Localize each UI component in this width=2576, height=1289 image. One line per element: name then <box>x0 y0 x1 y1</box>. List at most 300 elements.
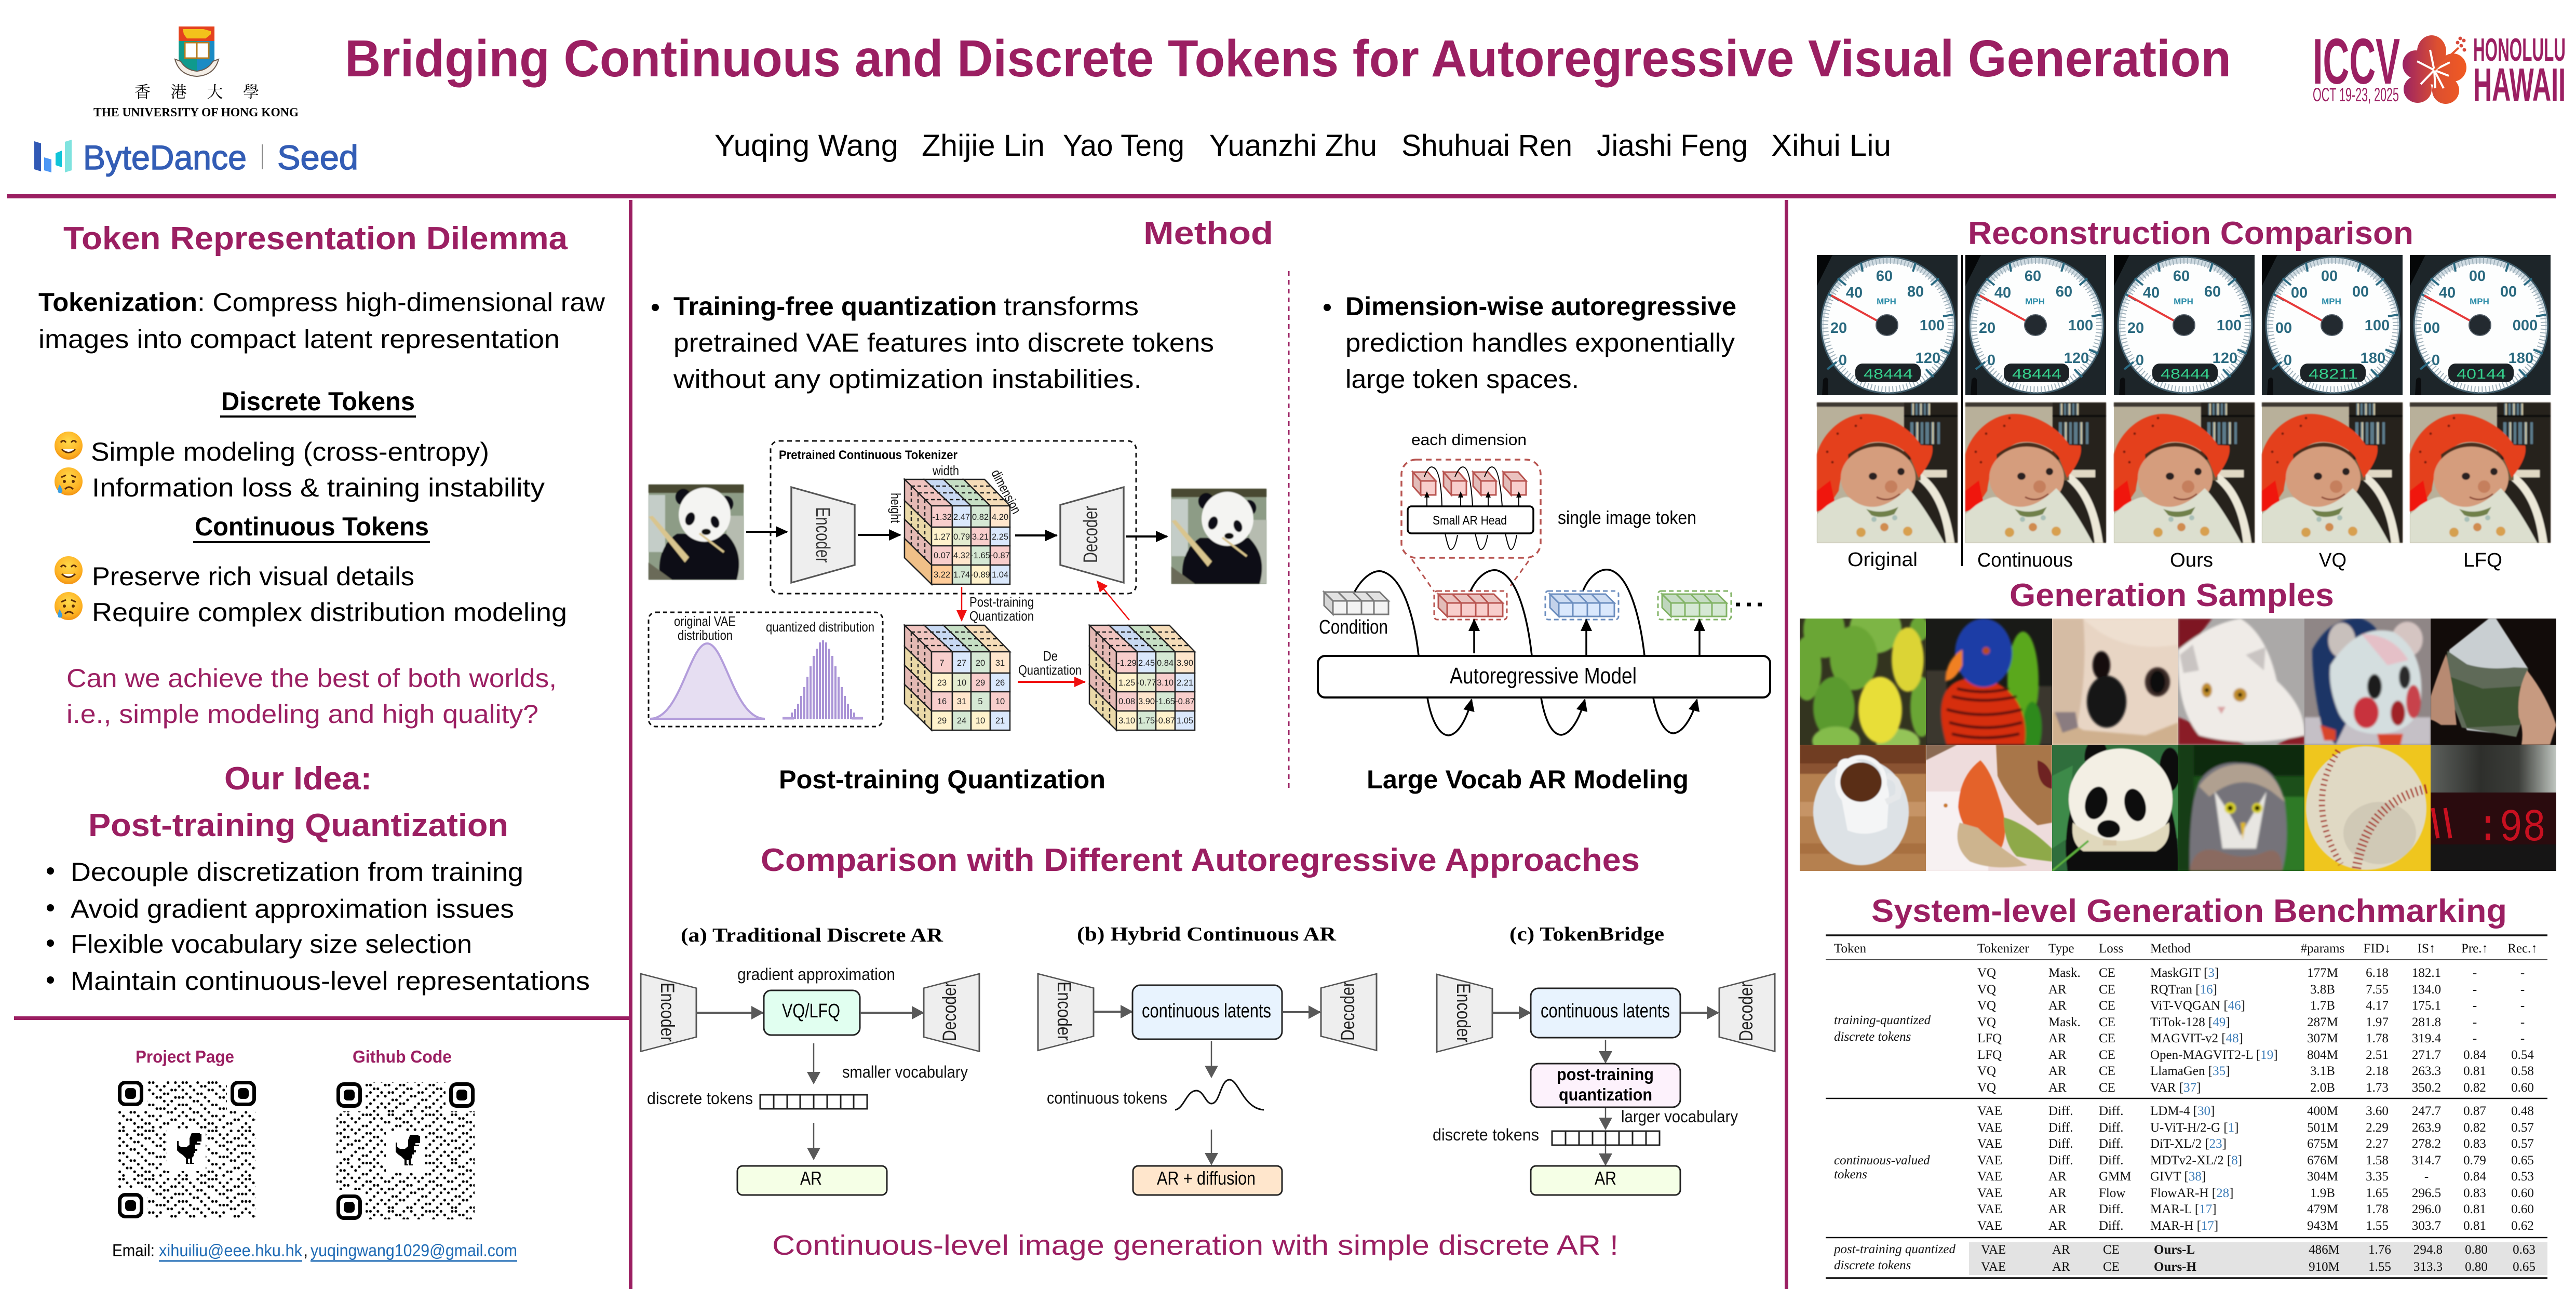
table group: continuous-valued tokens: 0.60 <box>2511 1202 2534 1216</box>
image: speedometer ours: 40 <box>2143 285 2160 301</box>
text block: dimension-wise autoregressive: Dimension-wise autoregressive <box>1345 292 1736 321</box>
labels: width height dimension: height <box>888 493 903 523</box>
image: speedometer VQ <box>2262 255 2403 395</box>
label: project page: Project Page <box>136 1047 234 1066</box>
box: continuous latents <box>1531 988 1680 1038</box>
table group: training-quantized discrete tokens: 0.82 <box>2463 1081 2486 1095</box>
table group: continuous-valued tokens: 0.53 <box>2511 1170 2534 1184</box>
image: speedometer LFQ: 180 <box>2508 350 2533 367</box>
table group: training-quantized discrete tokens: 271.7 <box>2412 1048 2441 1062</box>
table group: training-quantized discrete tokens: 7.55 <box>2366 983 2389 997</box>
icon: cry <box>55 592 83 620</box>
arrow <box>1015 534 1057 536</box>
image: speedometer VQ: MPH <box>2322 297 2341 306</box>
table group: continuous-valued tokens <box>1834 1104 2534 1233</box>
table group: training-quantized discrete tokens: 1.73 <box>2366 1081 2389 1095</box>
table header: #params <box>2301 942 2344 956</box>
table group: post-training quantized discrete tokens: discrete tokens <box>1834 1258 1911 1272</box>
arrow <box>1283 1011 1320 1013</box>
heading: Generation Samples <box>2009 578 2334 613</box>
logo: ICCV 2025 <box>2313 26 2566 111</box>
table group: continuous-valued tokens: VAE <box>1977 1202 2002 1216</box>
table group: training-quantized discrete tokens: - <box>2473 966 2477 980</box>
panel: links <box>112 1047 517 1261</box>
table group: continuous-valued tokens: VAE <box>1977 1137 2002 1151</box>
table group: training-quantized discrete tokens: 804M <box>2307 1048 2338 1062</box>
table group: post-training quantized discrete tokens: 1.55 <box>2368 1260 2391 1274</box>
caption: post-training quantization: Post-training Quantization <box>779 765 1105 794</box>
label: github code: Github Code <box>353 1047 452 1066</box>
table header: Token <box>1834 942 1867 956</box>
table group: continuous-valued tokens: DiT-XL/2 [23] <box>2150 1137 2227 1151</box>
table group: continuous-valued tokens: 675M <box>2307 1137 2338 1151</box>
label: discrete tokens: discrete tokens <box>647 1089 753 1108</box>
image: piggy bank <box>2304 619 2431 745</box>
image: mountain through cave <box>2431 619 2556 745</box>
image: baby LFQ <box>2410 402 2551 543</box>
image: speedometer ours: 20 <box>2127 320 2144 337</box>
image: lemons and limes <box>1800 619 1926 745</box>
distribution inset: quantized distribution <box>766 619 874 635</box>
table group: training-quantized discrete tokens: - <box>2520 983 2525 997</box>
decoder <box>924 974 979 1052</box>
text block: tokenization: : Compress high-dimensional raw <box>197 288 605 317</box>
table group: training-quantized discrete tokens: 0.54 <box>2511 1048 2534 1062</box>
image: speedometer continuous: 60 <box>2025 268 2041 285</box>
icon: cry <box>55 467 83 495</box>
cube: continuous latents: 2.25 <box>992 532 1008 542</box>
table group: continuous-valued tokens: MDTv2-XL/2 [8] <box>2150 1153 2242 1167</box>
text: email contacts: yuqingwang1029@gmail.com <box>311 1241 517 1260</box>
logo: University of Hong Kong: THE UNIVERSITY OF HONG KONG <box>93 106 299 119</box>
zoom box: AR head <box>1401 460 1541 558</box>
table group: training-quantized discrete tokens: LFQ <box>1977 1031 2002 1045</box>
table header: IS↑ <box>2418 942 2435 956</box>
image: speedometer LFQ: 40144 <box>2457 366 2506 382</box>
table group: training-quantized discrete tokens: 0.60 <box>2511 1081 2534 1095</box>
table group: post-training quantized discrete tokens: AR <box>2052 1260 2070 1274</box>
table group: training-quantized discrete tokens: - <box>2473 1031 2477 1045</box>
cube: reconstructed latents: 2.45 <box>1138 659 1155 668</box>
text: simple modeling: Simple modeling (cross-entropy) <box>91 437 489 466</box>
labels: width height dimension <box>888 463 1024 523</box>
arrow <box>1605 1146 1606 1165</box>
box: autoregressive model: Autoregressive Model <box>1450 663 1637 689</box>
table group: training-quantized discrete tokens: - <box>2473 983 2477 997</box>
cube: discrete indices: 10 <box>995 697 1005 706</box>
text block: training-free quantization: without any optimization instabilities. <box>673 365 1142 394</box>
table group: training-quantized discrete tokens: 0.58 <box>2511 1064 2534 1078</box>
token grid <box>1552 1131 1660 1145</box>
logo: University of Hong Kong: 香港大學 <box>134 79 259 102</box>
heading: discrete tokens: Discrete Tokens <box>221 387 415 416</box>
box: AR + diffusion <box>1133 1166 1282 1195</box>
table group: training-quantized discrete tokens: MaskGIT [3] <box>2150 966 2219 980</box>
icon: HKU crest <box>175 26 219 76</box>
logo: ByteDance Seed: Seed <box>277 138 358 177</box>
subtitle: (c) TokenBridge <box>1509 923 1664 945</box>
table group: continuous-valued tokens: 1.78 <box>2366 1202 2389 1216</box>
cube: continuous latents: -1.65 <box>970 551 990 560</box>
arrow <box>1605 1040 1606 1063</box>
table group: continuous-valued tokens: 314.7 <box>2412 1153 2441 1167</box>
text: email contacts: xihuiliu@eee.hku.hk <box>159 1241 302 1260</box>
diagram: large vocab AR modeling <box>1318 431 1770 735</box>
table group: training-quantized discrete tokens: 4.17 <box>2366 999 2389 1013</box>
box: AR + diffusion: AR + diffusion <box>1157 1167 1256 1189</box>
distribution inset <box>649 612 883 727</box>
image: speedometer continuous: 48444 <box>2012 366 2061 382</box>
cube: reconstructed latents: 3.10 <box>1157 678 1174 688</box>
table group: continuous-valued tokens: VAE <box>1977 1186 2002 1200</box>
image: speedometer ours: 48444 <box>2161 366 2210 382</box>
box: autoregressive model <box>1318 656 1770 697</box>
table group: continuous-valued tokens: 400M <box>2307 1104 2338 1118</box>
table group: continuous-valued tokens: Diff. <box>2099 1219 2123 1233</box>
table group: training-quantized discrete tokens: VQ <box>1977 1081 1996 1095</box>
arrows: autoregressive loops <box>1355 570 1700 735</box>
image: speedometer LFQ: 00 <box>2423 320 2440 337</box>
authors: Xihui Liu <box>1771 129 1891 163</box>
cube: continuous latents: 3.22 <box>934 570 950 580</box>
image: speedometer ours: 100 <box>2217 317 2242 334</box>
text block: tokenization <box>38 288 605 354</box>
table group: continuous-valued tokens: Diff. <box>2048 1137 2073 1151</box>
box: AR: AR <box>1595 1167 1616 1189</box>
token: red <box>1434 591 1507 620</box>
image: speedometer VQ: 180 <box>2361 350 2385 367</box>
table group: training-quantized discrete tokens: VQ <box>1977 1015 1996 1029</box>
cube: continuous latents: 1.04 <box>992 570 1008 580</box>
box: post-training quantization: post-training <box>1557 1065 1654 1084</box>
table group: continuous-valued tokens: 0.57 <box>2511 1121 2534 1135</box>
table group: training-quantized discrete tokens: 2.51 <box>2366 1048 2389 1062</box>
table group: post-training quantized discrete tokens: 1.76 <box>2368 1243 2391 1257</box>
table group: training-quantized discrete tokens: AR <box>2048 983 2067 997</box>
cube: continuous latents: 1.27 <box>934 532 950 542</box>
box: continuous latents: continuous latents <box>1541 1000 1670 1022</box>
label: decoder: Decoder <box>1080 506 1102 563</box>
box: AR <box>1531 1166 1680 1195</box>
image: speedometer VQ: 00 <box>2352 284 2369 300</box>
table group: continuous-valued tokens: 0.87 <box>2463 1104 2486 1118</box>
table group: post-training quantized discrete tokens: 0.63 <box>2513 1243 2535 1257</box>
table group: training-quantized discrete tokens: CE <box>2099 1031 2115 1045</box>
table group: training-quantized discrete tokens: Mask. <box>2048 1015 2081 1029</box>
image: speedometer original: 100 <box>1920 317 1945 334</box>
image: owl <box>2178 745 2304 871</box>
image: speedometer LFQ <box>2410 255 2551 395</box>
table group: post-training quantized discrete tokens: 0.80 <box>2465 1243 2488 1257</box>
table group: continuous-valued tokens: 296.5 <box>2412 1186 2441 1200</box>
table group: training-quantized discrete tokens: CE <box>2099 966 2115 980</box>
text block: dimension-wise autoregressive: prediction handles exponentially <box>1345 328 1735 357</box>
cube: reconstructed latents <box>1089 625 1195 730</box>
encoder <box>641 974 696 1052</box>
cube: reconstructed latents: -0.87 <box>1155 716 1175 726</box>
table group: training-quantized discrete tokens: AR <box>2048 1031 2067 1045</box>
cube: discrete indices: 7 <box>939 659 945 668</box>
arrow: post-training quantization <box>962 587 1034 624</box>
image: speedometer original: 48444 <box>1864 366 1913 382</box>
authors: Shuhuai Ren <box>1401 129 1572 163</box>
table group: training-quantized discrete tokens: 182.1 <box>2412 966 2441 980</box>
panel: benchmarking table <box>1826 893 2547 1278</box>
diagram: hybrid continuous AR <box>1038 923 1377 1195</box>
table group: post-training quantized discrete tokens: 910M <box>2309 1260 2340 1274</box>
cube: reconstructed latents: -0.87 <box>1175 697 1195 706</box>
table group: training-quantized discrete tokens: CE <box>2099 1064 2115 1078</box>
authors: Zhijie Lin <box>922 129 1045 163</box>
arrow <box>746 531 787 533</box>
arrow: de-quantization: De <box>1043 648 1058 664</box>
arrow: back to decoder <box>1097 581 1129 620</box>
image: panda <box>2052 745 2178 871</box>
label: decoder: Decoder <box>939 982 960 1041</box>
table group: continuous-valued tokens: AR <box>2048 1202 2067 1216</box>
arrow <box>813 1123 814 1159</box>
title: Bridging Continuous and Discrete Tokens for Autoregressive Visual Generation <box>345 30 2231 88</box>
cube: continuous latents: 0.07 <box>934 551 950 560</box>
label: VQ: VQ <box>2319 549 2346 571</box>
cube: discrete indices: 31 <box>995 659 1005 668</box>
divider line <box>1961 255 1963 566</box>
bullet list <box>47 857 590 996</box>
table group: continuous-valued tokens: 263.9 <box>2412 1121 2441 1135</box>
box: AR: AR <box>800 1167 822 1189</box>
arrow <box>813 1043 814 1083</box>
table group: continuous-valued tokens: 676M <box>2307 1153 2338 1167</box>
bullet list: Avoid gradient approximation issues <box>71 894 514 923</box>
decoder <box>1719 974 1775 1052</box>
table group: training-quantized discrete tokens: training-quantized <box>1834 1013 1931 1027</box>
table group: training-quantized discrete tokens: - <box>2473 1015 2477 1029</box>
cube: continuous latents: 4.20 <box>992 513 1008 522</box>
table group: continuous-valued tokens: 0.79 <box>2463 1153 2486 1167</box>
cube: continuous latents: 0.82 <box>972 513 989 522</box>
label: decoder: Decoder <box>1735 982 1757 1041</box>
decoder <box>1321 974 1377 1051</box>
heading: Post-training Quantization <box>88 808 508 843</box>
image: baby ours <box>2114 402 2255 543</box>
table group: continuous-valued tokens: 501M <box>2307 1121 2338 1135</box>
image: speedometer LFQ: 00 <box>2500 284 2517 300</box>
bullet list: Maintain continuous-level representations <box>71 966 590 996</box>
cube: reconstructed latents: 3.10 <box>1118 716 1135 726</box>
cube: continuous latents: -0.89 <box>970 570 990 580</box>
label: original: Original <box>1847 549 1918 571</box>
text block: tokenization: images into compact latent representation <box>38 325 560 354</box>
cube: discrete indices: 20 <box>976 659 985 668</box>
authors: Yao Teng <box>1063 129 1184 163</box>
cube: reconstructed latents: 1.25 <box>1118 678 1135 688</box>
cube: discrete indices: 10 <box>976 716 985 726</box>
image: speedometer ours: 60 <box>2173 268 2190 285</box>
image: speedometer original: 120 <box>1916 350 1940 367</box>
subtitle: (b) Hybrid Continuous AR <box>1077 923 1337 945</box>
label: encoder: Encoder <box>1453 983 1474 1042</box>
heading: Comparison with Different Autoregressive Approaches <box>761 842 1640 878</box>
cube: reconstructed latents: 2.21 <box>1177 678 1193 688</box>
table group: continuous-valued tokens: VAE <box>1977 1104 2002 1118</box>
table group: continuous-valued tokens: GMM <box>2099 1170 2132 1184</box>
table group: continuous-valued tokens: 304M <box>2307 1170 2338 1184</box>
table group: training-quantized discrete tokens: 3.8B <box>2310 983 2335 997</box>
table group: training-quantized discrete tokens: VQ <box>1977 966 1996 980</box>
callout question <box>66 664 557 729</box>
table group: training-quantized discrete tokens: 2.0B <box>2310 1081 2335 1095</box>
image: speedometer continuous: 40 <box>1994 285 2011 301</box>
table group: training-quantized discrete tokens: 3.1B <box>2310 1064 2335 1078</box>
image: speedometer LFQ: 0 <box>2432 352 2440 369</box>
panel: our idea <box>47 761 590 996</box>
table group: continuous-valued tokens: VAE <box>1977 1219 2002 1233</box>
cube: reconstructed latents: 0.08 <box>1118 697 1135 706</box>
cube: continuous latents <box>905 479 1010 584</box>
image: speedometer original: 60 <box>1876 268 1893 285</box>
table group: training-quantized discrete tokens: TiTok-128 [49] <box>2150 1015 2230 1029</box>
text block: training-free quantization: pretrained VAE features into discrete tokens <box>673 328 1214 357</box>
table group: training-quantized discrete tokens: CE <box>2099 1015 2115 1029</box>
cube: continuous latents: 3.21 <box>972 532 989 542</box>
bullet list: Decouple discretization from training <box>71 857 523 887</box>
label: encoder: Encoder <box>657 983 678 1042</box>
image: speedometer VQ: 0 <box>2284 352 2292 369</box>
text block: training-free quantization <box>652 292 1214 394</box>
table group: continuous-valued tokens: continuous-valued <box>1834 1153 1930 1167</box>
text: email contacts: Email: <box>112 1241 155 1260</box>
image: parrot <box>1926 619 2052 745</box>
table group: continuous-valued tokens: AR <box>2048 1186 2067 1200</box>
token: condition <box>1319 592 1388 638</box>
image: speedometer original <box>1817 255 1958 395</box>
table group: continuous-valued tokens: 0.82 <box>2463 1121 2486 1135</box>
image: speedometer ours <box>2114 255 2255 395</box>
table header: Pre.↑ <box>2461 942 2488 956</box>
arrow <box>1211 1041 1212 1077</box>
decoder <box>1060 487 1124 583</box>
cube: continuous latents: -0.87 <box>990 551 1010 560</box>
label: discrete tokens: discrete tokens <box>1433 1125 1539 1144</box>
table group: continuous-valued tokens: AR <box>2048 1170 2067 1184</box>
diagram: post-training quantization <box>649 441 1266 730</box>
text block: tokenization: Tokenization <box>38 288 197 317</box>
table group: training-quantized discrete tokens: 319.4 <box>2412 1031 2442 1045</box>
table group: training-quantized discrete tokens: VQ <box>1977 983 1996 997</box>
text: preserve details: Preserve rich visual details <box>92 562 414 591</box>
image: speedometer original: 40 <box>1846 285 1863 301</box>
table group: training-quantized discrete tokens: - <box>2520 1015 2525 1029</box>
image: speedometer original: 0 <box>1839 352 1847 369</box>
cube: reconstructed latents: -1.29 <box>1117 659 1137 668</box>
table group: continuous-valued tokens: Diff. <box>2048 1121 2073 1135</box>
cube: continuous latents: 4.32 <box>953 551 970 560</box>
image: speedometer original: 80 <box>1907 284 1924 300</box>
zoom box: AR head: Small AR Head <box>1433 514 1507 528</box>
token grid <box>760 1095 867 1109</box>
table group: post-training quantized discrete tokens: AR <box>2052 1243 2070 1257</box>
cube: discrete indices: 23 <box>937 678 947 688</box>
image: input panda <box>649 485 744 580</box>
cube: discrete indices: 26 <box>995 678 1005 688</box>
arrow <box>1126 535 1167 538</box>
table group: training-quantized discrete tokens: - <box>2520 966 2525 980</box>
image: speedometer continuous: 20 <box>1979 320 1995 337</box>
table group: post-training quantized discrete tokens: VAE <box>1981 1243 2006 1257</box>
table group: continuous-valued tokens: VAE <box>1977 1153 2002 1167</box>
text: information loss: Information loss & training instability <box>92 473 545 502</box>
table header <box>1834 942 2538 956</box>
image: speedometer continuous: 60 <box>2056 284 2072 300</box>
table group: continuous-valued tokens: 0.48 <box>2511 1104 2534 1118</box>
table group: post-training quantized discrete tokens: 294.8 <box>2413 1243 2443 1257</box>
table group: continuous-valued tokens: 0.65 <box>2511 1153 2534 1167</box>
table group: training-quantized discrete tokens: AR <box>2048 1048 2067 1062</box>
table group: continuous-valued tokens: FlowAR-H [28] <box>2150 1186 2233 1200</box>
arrow: post-training quantization: Quantization <box>969 608 1034 624</box>
token: condition: Condition <box>1319 616 1388 638</box>
arrow: de-quantization: Quantization <box>1018 662 1082 678</box>
caption: large vocab AR modeling: Large Vocab AR Modeling <box>1367 765 1689 794</box>
logo: ICCV 2025: OCT 19-23, 2025 <box>2313 84 2399 105</box>
table group: training-quantized discrete tokens: 175.1 <box>2412 999 2441 1013</box>
table group: continuous-valued tokens: 0.83 <box>2463 1186 2486 1200</box>
distribution inset: distribution <box>678 627 733 643</box>
table group: continuous-valued tokens: 3.60 <box>2366 1104 2389 1118</box>
QR code: github code <box>335 1081 476 1221</box>
table group: continuous-valued tokens: 0.83 <box>2463 1137 2486 1151</box>
label: LFQ: LFQ <box>2463 549 2502 571</box>
image: baseball <box>2304 745 2431 871</box>
cube: reconstructed latents: 3.90 <box>1138 697 1155 706</box>
label: ours: Ours <box>2170 549 2213 571</box>
table group: training-quantized discrete tokens: - <box>2473 999 2477 1013</box>
table group: continuous-valued tokens: U-ViT-H/2-G [1] <box>2150 1121 2238 1135</box>
table group: continuous-valued tokens: GIVT [38] <box>2150 1170 2206 1184</box>
arrow <box>1605 1108 1606 1129</box>
image: white cat <box>2178 619 2304 745</box>
arrow <box>860 1012 923 1014</box>
image: speedometer continuous: 0 <box>1987 352 1995 369</box>
table group: continuous-valued tokens: 0.81 <box>2463 1219 2486 1233</box>
table group: training-quantized discrete tokens: 0.81 <box>2463 1064 2486 1078</box>
arrow <box>1093 1011 1132 1013</box>
heading: Reconstruction Comparison <box>1968 216 2413 251</box>
logo: ByteDance Seed: ByteDance <box>83 138 247 177</box>
box: post-training quantization <box>1531 1064 1680 1107</box>
labels: width height dimension: dimension <box>988 467 1024 516</box>
table group: training-quantized discrete tokens: 263.3 <box>2412 1064 2441 1078</box>
cube: continuous latents: 2.47 <box>953 513 970 522</box>
table group: training-quantized discrete tokens: VAR [37] <box>2150 1081 2201 1095</box>
token: green <box>1658 591 1731 620</box>
icon: smile <box>55 432 83 460</box>
table header: FID↓ <box>2364 942 2391 956</box>
heading: System-level Generation Benchmarking <box>1871 893 2507 929</box>
image: speedometer ours: 0 <box>2136 352 2144 369</box>
image: speedometer continuous: 120 <box>2064 350 2089 367</box>
image: speedometer ours: 60 <box>2204 284 2221 300</box>
callout: conclusion: Continuous-level image generation with simple discrete AR ! <box>772 1230 1619 1261</box>
table group: continuous-valued tokens: AR <box>2048 1219 2067 1233</box>
encoder <box>791 487 855 583</box>
table group: training-quantized discrete tokens: - <box>2520 999 2525 1013</box>
table group: training-quantized discrete tokens: 350.2 <box>2412 1081 2441 1095</box>
image: coffee cup <box>1800 745 1926 871</box>
table group: post-training quantized discrete tokens <box>1833 1242 2535 1274</box>
table group: post-training quantized discrete tokens: Ours-H <box>2154 1260 2196 1274</box>
table group: training-quantized discrete tokens: CE <box>2099 1048 2115 1062</box>
